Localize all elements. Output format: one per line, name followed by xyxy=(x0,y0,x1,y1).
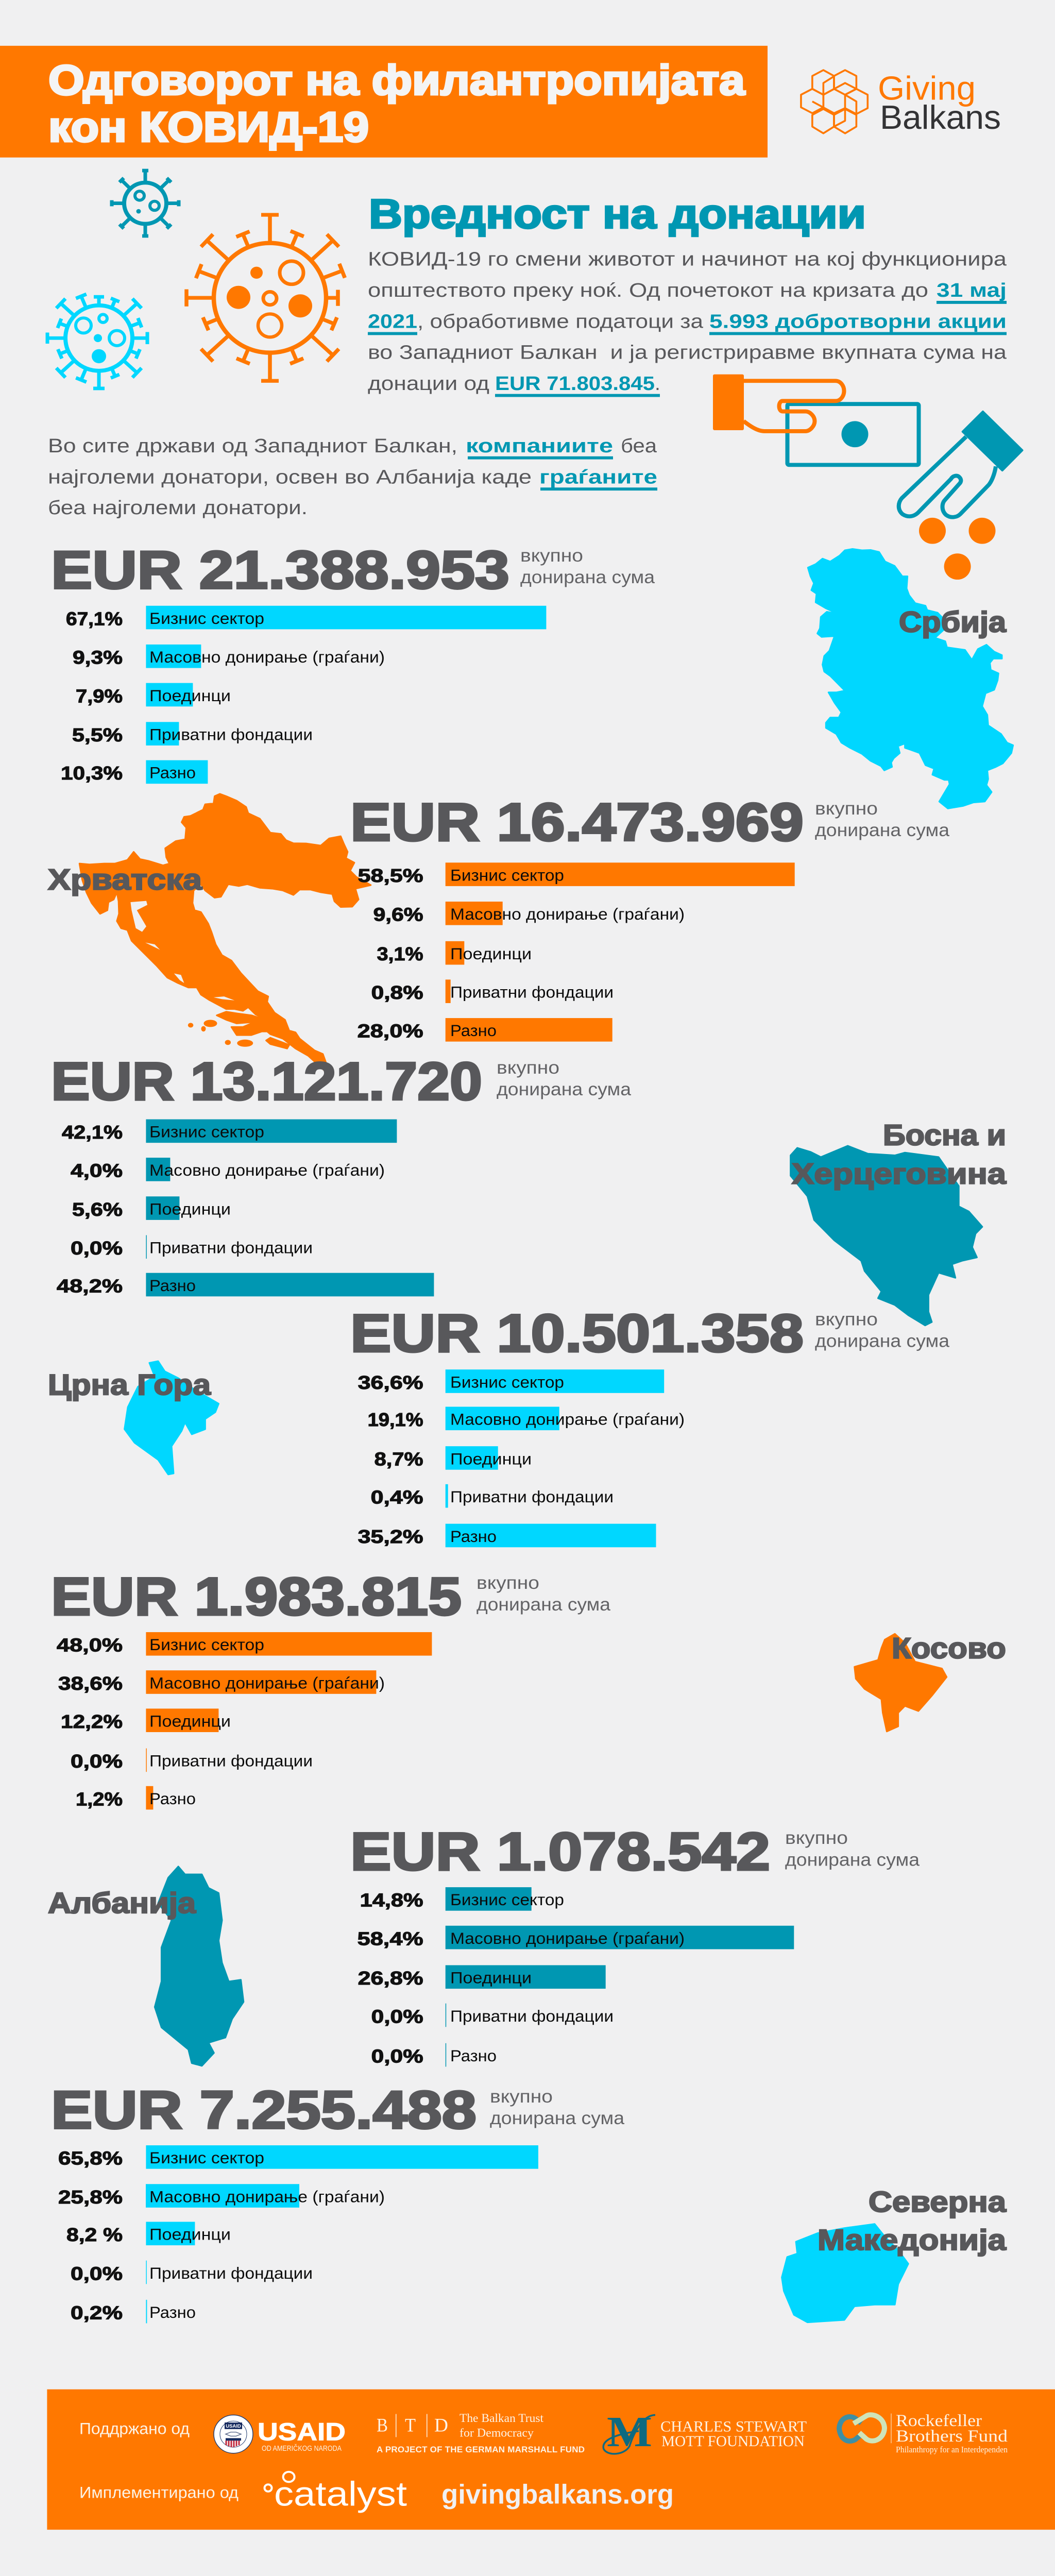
text block: intro paragraph: во Западниот Балкан и ја регистриравме вкупната сума на xyxy=(368,342,1007,363)
bar chart: Bosnia: 5,6% xyxy=(72,1199,123,1220)
heading: Bosnia total: EUR 13.121.720 xyxy=(51,1052,482,1111)
caption: total donated: донирана сума xyxy=(520,567,655,587)
bar chart: North Macedonia: Поединци xyxy=(149,2225,231,2244)
panel: Albania xyxy=(48,1822,920,2066)
logo: Rockefeller Brothers Fund xyxy=(839,2411,1008,2454)
text block: intro paragraph: 31 мај xyxy=(937,280,1007,301)
title banner xyxy=(0,46,768,158)
caption: total donated: вкупно xyxy=(490,2086,553,2107)
bar chart: Montenegro: Масовно донирање (граѓани) xyxy=(450,1410,685,1429)
country label: Северна xyxy=(869,2186,1007,2218)
logo: Rockefeller Brothers Fund: Brothers Fund xyxy=(896,2427,1008,2446)
bar chart: Albania: 58,4% xyxy=(358,1928,423,1949)
bar chart: Croatia xyxy=(358,862,795,1042)
caption: total donated: донирана сума xyxy=(477,1594,610,1615)
text block: intro paragraph: 2021 xyxy=(368,311,417,333)
bar chart: Montenegro xyxy=(358,1369,685,1547)
bar chart: Montenegro: Бизнис сектор xyxy=(450,1373,564,1391)
bar chart: Croatia: 28,0% xyxy=(358,1021,423,1042)
bar chart: Kosovo: 38,6% xyxy=(58,1673,123,1694)
bar chart: Kosovo: Бизнис сектор xyxy=(149,1635,264,1654)
logo: Balkan Trust for Democracy: The Balkan Trust xyxy=(460,2412,543,2425)
logo: Giving Balkans: Giving xyxy=(878,70,976,107)
bar chart: North Macedonia: Масовно донирање (граѓани) xyxy=(149,2188,385,2206)
bar chart: North Macedonia: 0,0% xyxy=(71,2263,123,2284)
panel: Serbia xyxy=(51,540,1013,808)
map: Bosnia and Herzegovina xyxy=(791,1146,982,1326)
logo: Charles Stewart Mott Foundation: CHARLES STEWART xyxy=(660,2419,807,2435)
logo: USAID: OD AMERIČKOG NARODA xyxy=(262,2444,342,2453)
caption: total donated xyxy=(785,1827,920,1870)
logo: Balkan Trust for Democracy: T xyxy=(405,2415,416,2436)
panel: Croatia xyxy=(48,792,949,1070)
bar chart: North Macedonia: 25,8% xyxy=(58,2187,123,2208)
text block: intro paragraph: EUR 71.803.845 xyxy=(495,372,655,395)
bar chart: Albania: 0,0% xyxy=(371,2046,423,2066)
text block: intro paragraph: КОВИД-19 го смени животот и начинот на кој функционира xyxy=(368,248,1007,270)
country label: Херцеговина xyxy=(792,1158,1007,1190)
bar chart: Kosovo: Масовно донирање (граѓани) xyxy=(149,1674,385,1692)
text block: largest donors xyxy=(48,435,657,519)
caption: total donated: вкупно xyxy=(497,1057,559,1078)
text: implemented by: Имплементирано од xyxy=(79,2483,239,2502)
country label: Косово xyxy=(892,1632,1006,1665)
country label: Македонија xyxy=(818,2224,1007,2257)
bar chart: Montenegro: Приватни фондации xyxy=(450,1487,614,1506)
logo: Balkan Trust for Democracy: B xyxy=(377,2415,388,2436)
panel: Kosovo xyxy=(51,1567,1006,1809)
country label: Србија xyxy=(899,606,1007,638)
logo: Giving Balkans xyxy=(801,70,1001,136)
bar chart: Bosnia: Поединци xyxy=(149,1200,231,1218)
caption: total donated xyxy=(490,2086,624,2128)
bar chart: Kosovo: Поединци xyxy=(149,1712,231,1730)
text block: largest donors: компаниите xyxy=(466,435,613,457)
caption: total donated: вкупно xyxy=(477,1572,539,1593)
bar chart: Albania: Разно xyxy=(450,2046,497,2065)
heading: donation value: Вредност на донации xyxy=(369,191,866,237)
bar chart: North Macedonia xyxy=(58,2145,538,2323)
bar chart: Croatia: Масовно донирање (граѓани) xyxy=(450,905,685,923)
text block: largest donors: Во сите држави од Западниот Балкан, xyxy=(48,435,457,457)
caption: total donated xyxy=(497,1057,631,1099)
caption: total donated xyxy=(815,1309,949,1351)
bar chart: Croatia: 0,8% xyxy=(371,982,423,1003)
bar chart: Serbia: 9,3% xyxy=(73,647,123,668)
text block: intro paragraph: донации од xyxy=(368,372,489,395)
map: Montenegro xyxy=(125,1361,218,1475)
bar chart: Croatia: Разно xyxy=(450,1022,497,1040)
bar chart: Serbia: Поединци xyxy=(149,686,231,705)
text block: intro paragraph xyxy=(368,248,1007,397)
text block: largest donors: беа xyxy=(621,435,657,457)
bar chart: North Macedonia: Приватни фондации xyxy=(149,2264,313,2282)
logo: Rockefeller Brothers Fund: Rockefeller xyxy=(896,2411,982,2430)
bar chart: Albania: 26,8% xyxy=(358,1968,423,1989)
bar chart: Serbia: 7,9% xyxy=(76,686,123,706)
country label: Албанија xyxy=(48,1887,196,1920)
bar chart: Kosovo xyxy=(57,1632,432,1809)
caption: total donated: вкупно xyxy=(815,798,878,819)
heading: Serbia total: EUR 21.388.953 xyxy=(51,540,509,600)
logo: Balkan Trust for Democracy: A PROJECT OF THE GERMAN MARSHALL FUND xyxy=(377,2445,585,2454)
icon: orange virus xyxy=(186,215,345,381)
text block: largest donors: граѓаните xyxy=(539,466,657,488)
bar chart: Montenegro: 35,2% xyxy=(358,1527,423,1547)
bar chart: Kosovo: 48,0% xyxy=(57,1635,123,1655)
bar chart: Montenegro: 19,1% xyxy=(368,1409,423,1430)
bar chart: Bosnia: Приватни фондации xyxy=(149,1239,313,1257)
text block: intro paragraph: . xyxy=(655,372,660,395)
bar chart: Albania: Поединци xyxy=(450,1969,532,1987)
logo: Balkan Trust for Democracy: for Democracy xyxy=(460,2427,534,2439)
logo: Balkan Trust for Democracy xyxy=(377,2412,585,2454)
title banner: Одговорот на филантропијата xyxy=(48,56,745,104)
bar chart: Montenegro: Разно xyxy=(450,1527,497,1546)
caption: total donated xyxy=(520,545,655,587)
text block: intro paragraph: 5.993 добротворни акции xyxy=(709,311,1007,333)
icon: cyan virus xyxy=(47,294,147,388)
bar chart: Montenegro: 8,7% xyxy=(375,1449,423,1470)
country label xyxy=(792,1119,1007,1190)
icon: teal virus xyxy=(112,171,179,236)
heading: Montenegro total: EUR 10.501.358 xyxy=(350,1304,804,1363)
panel: North Macedonia xyxy=(51,2080,1007,2323)
bar chart: Croatia: Приватни фондации xyxy=(450,983,614,1001)
bar chart: Kosovo: 1,2% xyxy=(76,1789,123,1809)
bar chart: Serbia: 10,3% xyxy=(61,763,123,784)
map: Albania xyxy=(155,1867,244,2066)
text block: largest donors: беа најголеми донатори. xyxy=(48,497,308,519)
caption: total donated: донирана сума xyxy=(815,1331,949,1351)
bar chart: Bosnia xyxy=(57,1120,434,1296)
heading: Croatia total: EUR 16.473.969 xyxy=(350,792,804,852)
panel: Montenegro xyxy=(48,1304,949,1547)
website link: givingbalkans.org xyxy=(441,2480,674,2510)
bar chart: Serbia: Разно xyxy=(149,764,196,782)
bar chart: Serbia: 67,1% xyxy=(66,608,123,629)
bar chart: Kosovo: 12,2% xyxy=(61,1711,123,1732)
bar chart: Albania: Приватни фондации xyxy=(450,2007,614,2025)
panel: Bosnia and Herzegovina xyxy=(51,1052,1007,1326)
bar chart: Serbia: 5,5% xyxy=(72,724,123,745)
caption: total donated: вкупно xyxy=(520,545,583,566)
bar chart: Bosnia: 0,0% xyxy=(71,1238,123,1259)
bar chart: Montenegro: 0,4% xyxy=(371,1487,423,1507)
logo: Giving Balkans: Balkans xyxy=(880,99,1001,136)
bar chart: North Macedonia: 8,2 % xyxy=(66,2224,123,2245)
map: Serbia xyxy=(808,549,1013,808)
map: North Macedonia xyxy=(782,2224,908,2323)
caption: total donated xyxy=(477,1572,610,1615)
country label: Босна и xyxy=(883,1119,1006,1152)
logo: Charles Stewart Mott Foundation: M xyxy=(607,2408,652,2456)
bar chart: Albania: 0,0% xyxy=(371,2006,423,2027)
bar chart: Serbia xyxy=(61,606,546,784)
logo: USAID xyxy=(214,2415,346,2453)
bar chart: North Macedonia: Бизнис сектор xyxy=(149,2149,264,2167)
bar chart: Croatia: 3,1% xyxy=(377,944,423,964)
bar chart: Bosnia: 4,0% xyxy=(71,1160,123,1181)
caption: total donated: донирана сума xyxy=(497,1079,631,1099)
text block: largest donors: најголеми донатори, освен во Албанија каде xyxy=(48,466,532,488)
bar chart: Bosnia: Разно xyxy=(149,1276,196,1295)
bar chart: Croatia: Бизнис сектор xyxy=(450,866,564,884)
bar chart: Croatia: 9,6% xyxy=(373,904,423,925)
map: Croatia xyxy=(79,794,371,1070)
logo: Catalyst: catalyst xyxy=(274,2475,407,2513)
bar chart: Croatia: Поединци xyxy=(450,944,532,963)
bar chart: Serbia: Приватни фондации xyxy=(149,725,313,743)
bar chart: Bosnia: Масовно донирање (граѓани) xyxy=(149,1161,385,1179)
caption: total donated: донирана сума xyxy=(785,1850,920,1870)
logo: Rockefeller Brothers Fund: Philanthropy for an Interdependen xyxy=(896,2445,1008,2454)
caption: total donated xyxy=(815,798,949,840)
bar chart: Bosnia: 48,2% xyxy=(57,1276,123,1296)
text block: intro paragraph: , обработивме податоци за xyxy=(417,311,704,333)
text: supported by: Поддржано од xyxy=(79,2419,190,2438)
country label xyxy=(818,2186,1007,2257)
bar chart: Kosovo: Разно xyxy=(149,1789,196,1808)
footer panel xyxy=(47,2389,1055,2530)
bar chart: Albania: Бизнис сектор xyxy=(450,1891,564,1909)
bar chart: Croatia: 58,5% xyxy=(358,865,423,886)
logo: Balkan Trust for Democracy: D xyxy=(434,2415,448,2436)
bar chart: North Macedonia: Разно xyxy=(149,2303,196,2321)
bar chart: Montenegro: Поединци xyxy=(450,1450,532,1468)
caption: total donated: донирана сума xyxy=(815,820,949,840)
bar chart: North Macedonia: 65,8% xyxy=(58,2148,123,2169)
bar chart: Montenegro: 36,6% xyxy=(358,1372,423,1393)
bar chart: Albania: Масовно донирање (граѓани) xyxy=(450,1929,685,1947)
logo: Charles Stewart Mott Foundation: MOTT FOUNDATION xyxy=(661,2433,805,2450)
bar chart: Albania xyxy=(358,1887,794,2066)
bar chart: Kosovo: Приватни фондации xyxy=(149,1752,313,1770)
heading: Kosovo total: EUR 1.983.815 xyxy=(51,1567,462,1626)
country label: Хрватска xyxy=(48,863,202,896)
bar chart: Albania: 14,8% xyxy=(360,1890,423,1911)
country label: Црна Гора xyxy=(48,1369,211,1401)
caption: total donated: вкупно xyxy=(785,1827,848,1848)
bar chart: Serbia: Масовно донирање (граѓани) xyxy=(149,648,385,666)
bar chart: North Macedonia: 0,2% xyxy=(71,2302,123,2323)
map: Kosovo xyxy=(855,1634,947,1732)
icon: hands exchanging money and coins xyxy=(713,375,1022,580)
bar chart: Bosnia: Бизнис сектор xyxy=(149,1123,264,1141)
bar chart: Kosovo: 0,0% xyxy=(71,1751,123,1772)
heading: Albania total: EUR 1.078.542 xyxy=(350,1822,770,1882)
heading: North Macedonia total: EUR 7.255.488 xyxy=(51,2080,477,2140)
logo: USAID: USAID xyxy=(226,2424,241,2429)
bar chart: Bosnia: 42,1% xyxy=(62,1122,123,1143)
bar chart: Serbia: Бизнис сектор xyxy=(149,609,264,628)
logo: USAID: USAID xyxy=(258,2418,346,2446)
caption: total donated: вкупно xyxy=(815,1309,878,1329)
logo: Charles Stewart Mott Foundation xyxy=(603,2408,807,2456)
text block: intro paragraph: општеството преку ноќ. Од почетокот на кризата до xyxy=(368,280,928,301)
caption: total donated: донирана сума xyxy=(490,2108,624,2128)
title banner: кон КОВИД-19 xyxy=(48,103,369,150)
